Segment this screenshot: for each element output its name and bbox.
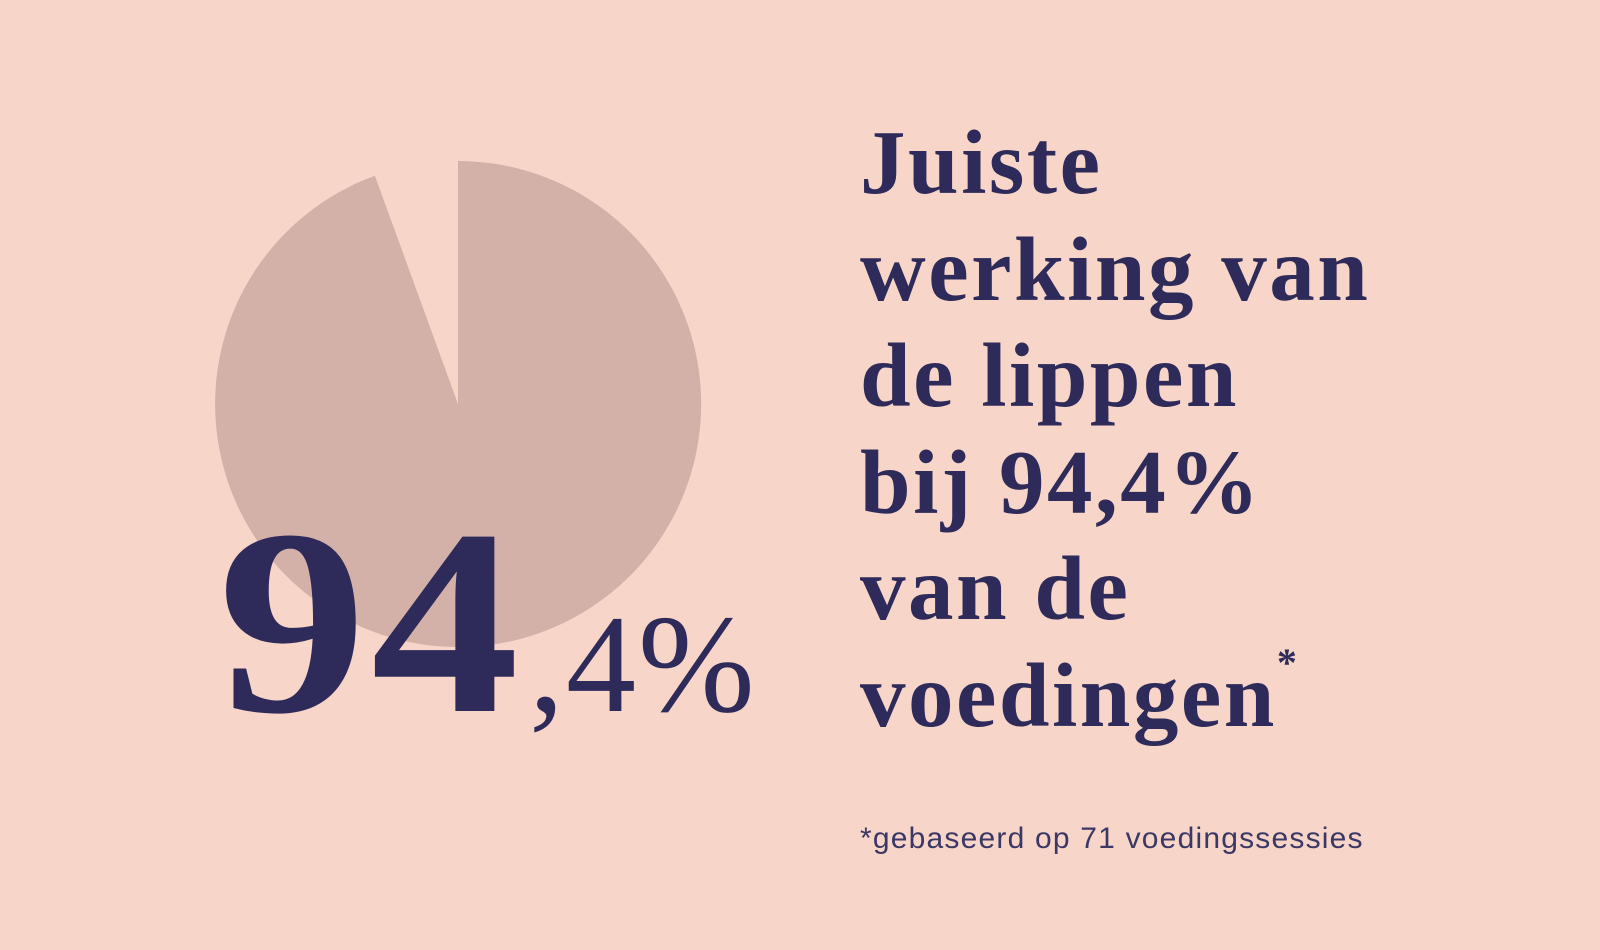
title text: van de xyxy=(860,538,1130,639)
title text: voedingen* xyxy=(860,640,1299,746)
footnote: *gebaseerd op 71 voedingssessies xyxy=(860,822,1364,855)
title text: werking van xyxy=(860,218,1370,320)
big percentage: ,4% xyxy=(529,587,757,742)
title text: Juiste xyxy=(860,112,1102,213)
title text: de lippen xyxy=(860,325,1239,426)
title text: bij 94,4% xyxy=(860,432,1262,532)
title text xyxy=(860,112,1370,746)
big percentage: 94 xyxy=(218,476,524,769)
big percentage xyxy=(218,476,757,769)
